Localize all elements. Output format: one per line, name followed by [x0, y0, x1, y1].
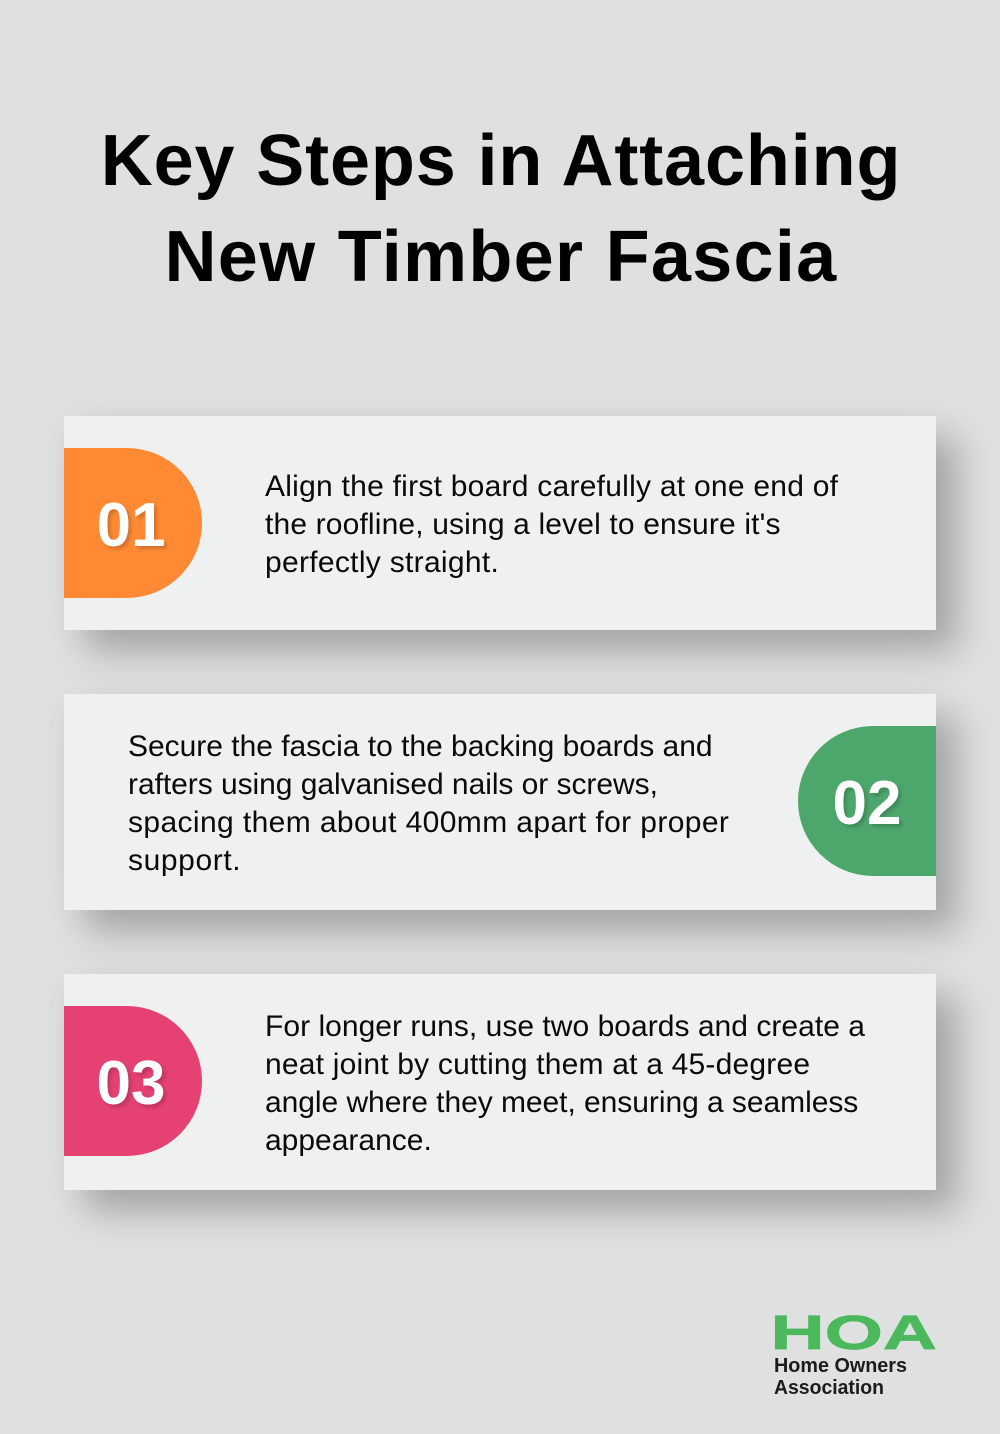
logo: HOA Home Owners Association	[770, 1306, 937, 1399]
panel: step 1	[64, 416, 936, 630]
title	[101, 121, 901, 297]
text: step 1: perfectly straight.	[265, 546, 499, 579]
panel: step 3	[64, 974, 936, 1190]
text: step 2: rafters using galvanised nails or screws,	[128, 768, 658, 801]
badge: 03: 03	[97, 1049, 165, 1118]
title: New Timber Fascia	[164, 217, 838, 297]
text: step 3: For longer runs, use two boards and create a	[265, 1010, 865, 1043]
text: step 3	[265, 1010, 865, 1157]
text: step 1: Align the first board carefully at one end of	[265, 470, 838, 503]
text: step 2: Secure the fascia to the backing boards and	[128, 730, 713, 763]
badge: 01	[64, 448, 202, 598]
text: step 2: spacing them about 400mm apart for proper	[128, 806, 729, 839]
title: Key Steps in Attaching	[101, 121, 901, 201]
panel: step 2	[64, 694, 936, 910]
text: step 3: angle where they meet, ensuring a seamless	[265, 1086, 858, 1119]
badge: 03	[64, 1006, 202, 1156]
text: step 3: neat joint by cutting them at a 45-degree	[265, 1048, 810, 1081]
logo: HOA Home Owners Association: Association	[774, 1377, 884, 1399]
badge: 01: 01	[97, 491, 165, 560]
text: step 2: support.	[128, 844, 241, 877]
badge: 02: 02	[833, 769, 901, 838]
text: step 1: the roofline, using a level to ensure it's	[265, 508, 781, 541]
logo: HOA Home Owners Association: HOA	[770, 1306, 937, 1359]
text: step 2	[128, 730, 729, 877]
text: step 1	[265, 470, 838, 579]
badge: 02	[798, 726, 936, 876]
text: step 3: appearance.	[265, 1124, 432, 1157]
logo: HOA Home Owners Association: Home Owners	[774, 1355, 907, 1377]
